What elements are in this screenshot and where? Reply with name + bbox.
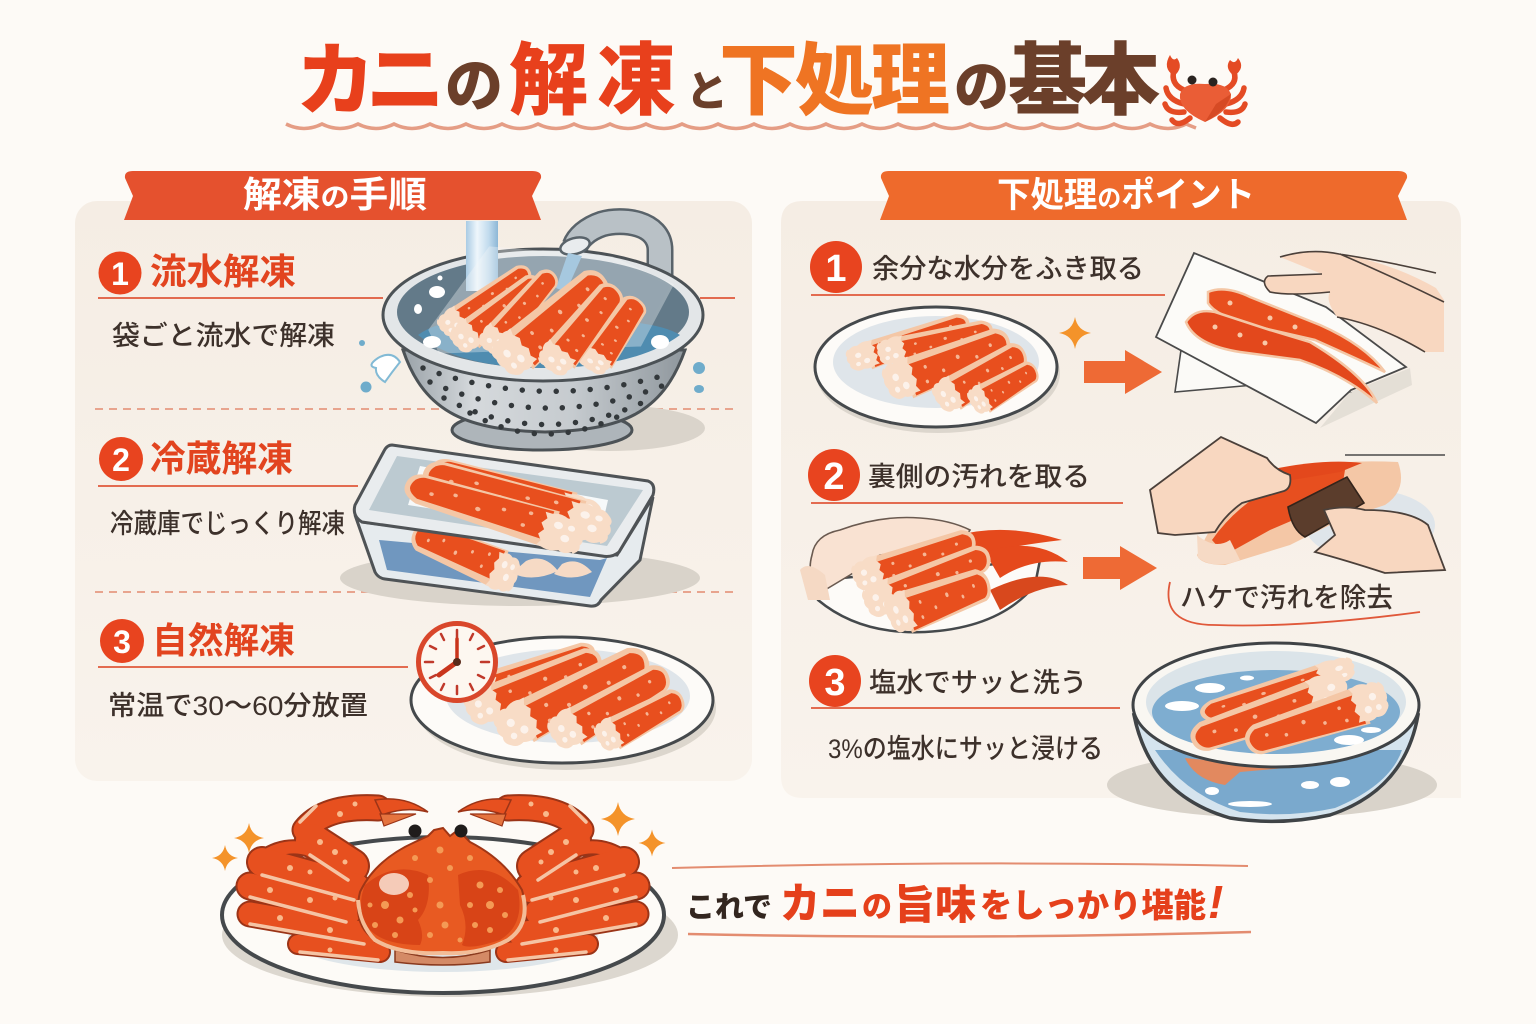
illustration: brushing with hands	[1150, 437, 1445, 573]
step 3: natural thaw: 3	[113, 624, 131, 660]
title: 下	[719, 36, 798, 125]
title: と	[686, 68, 728, 115]
title: 基	[1008, 36, 1087, 125]
title: の	[954, 56, 1009, 118]
step 2: refrigerator thaw: 冷蔵解凍	[150, 438, 293, 479]
illustration: whole crab on plate	[222, 799, 678, 997]
step 2: remove dirt on underside: 2	[823, 456, 845, 498]
title wave underline	[286, 124, 1196, 128]
step 2: remove dirt on underside: 裏側の汚れを取る	[868, 462, 1090, 492]
closing message: 旨味	[894, 882, 976, 928]
step 1: running water thaw	[98, 251, 735, 351]
closing message: をしっかり堪能	[980, 887, 1206, 924]
closing message	[672, 863, 1251, 937]
step 3: quick salt-water rinse: 3	[824, 662, 846, 704]
step 2: refrigerator thaw	[98, 437, 358, 539]
title: 凍	[597, 36, 676, 125]
step 3: natural thaw: 常温で30〜60分放置	[108, 691, 368, 721]
title: 理	[871, 36, 950, 125]
title: ニ	[366, 36, 445, 125]
step 3: quick salt-water rinse: 3%の塩水にサッと浸ける	[828, 734, 1103, 764]
heading ribbon: preparation points: 下処理のポイント	[997, 176, 1255, 215]
step 1: wipe off moisture	[810, 241, 1165, 295]
brush label with underline curve	[1168, 582, 1420, 625]
step 3: quick salt-water rinse: 塩水でサッと洗う	[869, 668, 1087, 698]
icon: title crab	[1165, 55, 1245, 124]
heading ribbon: thawing steps	[124, 171, 541, 220]
arrow: step 2	[1083, 546, 1157, 590]
step 2: remove dirt on underside	[808, 449, 1123, 503]
illustration: refrigerator container	[340, 445, 700, 606]
illustration: plate and clock	[411, 624, 716, 770]
illustration: bowl of salt water	[1107, 643, 1437, 821]
illustration: colander under running water	[359, 221, 705, 451]
closing message: これで	[686, 892, 772, 924]
illustration: hand and legs on plate	[800, 518, 1068, 639]
sparkles around crab	[212, 802, 666, 871]
panel: thawing steps	[75, 201, 752, 781]
panel: preparation points	[781, 201, 1461, 798]
icon: sparkle	[1059, 317, 1091, 349]
step 1: wipe off moisture: 余分な水分をふき取る	[872, 254, 1144, 284]
closing message: の	[862, 891, 892, 924]
step 3: natural thaw	[98, 619, 408, 721]
title: カ	[296, 36, 375, 125]
brush label with underline curve: ハケで汚れを除去	[1180, 583, 1393, 613]
step 1: running water thaw: 1	[111, 256, 129, 292]
closing message: !	[1208, 876, 1223, 928]
title: 本	[1081, 36, 1160, 125]
step 1: running water thaw: 袋ごと流水で解凍	[112, 321, 335, 351]
heading ribbon: preparation points	[880, 171, 1407, 220]
illustration: paper towel and hand	[1156, 252, 1444, 428]
step 3: natural thaw: 自然解凍	[152, 620, 295, 661]
step 3: quick salt-water rinse	[809, 655, 1120, 764]
title: 処	[795, 36, 874, 125]
arrow: step 1	[1084, 350, 1162, 394]
step 1: running water thaw: 流水解凍	[150, 251, 296, 292]
step 2: refrigerator thaw: 冷蔵庫でじっくり解凍	[110, 509, 345, 539]
step 2: refrigerator thaw: 2	[112, 442, 130, 478]
title: 解	[509, 36, 588, 125]
closing message: カニ	[780, 880, 860, 927]
title	[296, 36, 1160, 125]
illustration: plate of legs	[815, 307, 1060, 433]
step 1: wipe off moisture: 1	[825, 248, 847, 290]
heading ribbon: thawing steps: 解凍の手順	[243, 174, 427, 215]
title: の	[445, 54, 503, 119]
